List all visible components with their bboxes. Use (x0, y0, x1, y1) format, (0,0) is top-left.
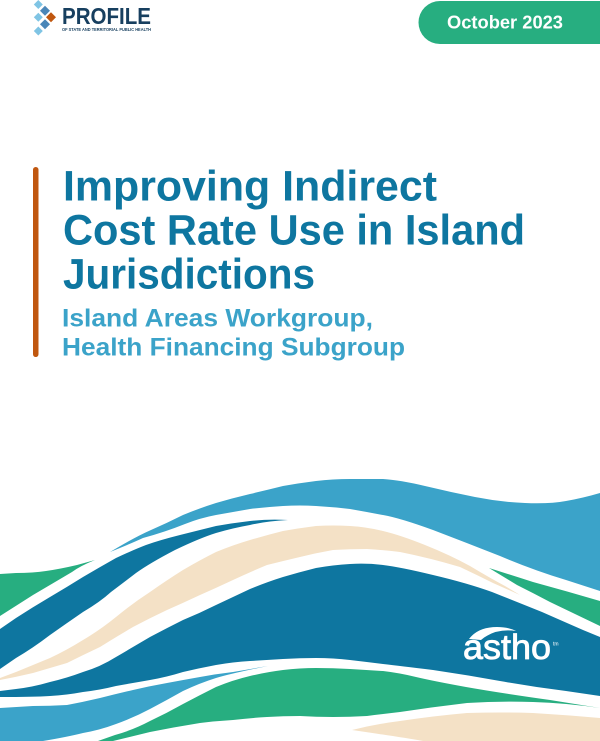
logo wordmark: PROFILE (62, 3, 151, 29)
date badge (418, 1, 600, 44)
trademark: tm (553, 642, 559, 648)
title: Cost Rate Use in Island (63, 206, 525, 254)
accent bar (33, 167, 38, 357)
logo arc (469, 627, 516, 640)
subtitle: Health Financing Subgroup (62, 334, 405, 362)
wave: light blue top (110, 479, 600, 591)
icon: PROFILE diamonds (34, 0, 56, 36)
date badge: October 2023 (447, 12, 563, 32)
logo: astho (463, 627, 559, 667)
wave: dark blue large (0, 564, 600, 697)
title (63, 162, 525, 298)
wave: green lower (98, 668, 600, 741)
wave: green right (489, 568, 600, 626)
logo wordmark: astho (463, 628, 551, 667)
title: Improving Indirect (63, 162, 437, 210)
title: Jurisdictions (63, 250, 315, 298)
wave: light blue lower (0, 666, 268, 741)
wave: green upper left (0, 560, 95, 616)
wave: tan bottom (352, 712, 600, 741)
wave: dark blue upper (0, 520, 288, 669)
subtitle: Island Areas Workgroup, (62, 304, 373, 332)
logo: PROFILE (34, 0, 151, 36)
wave: tan middle (0, 526, 520, 680)
subtitle (62, 304, 405, 362)
waves illustration (0, 479, 600, 741)
logo tagline: OF STATE AND TERRITORIAL PUBLIC HEALTH (62, 27, 151, 32)
